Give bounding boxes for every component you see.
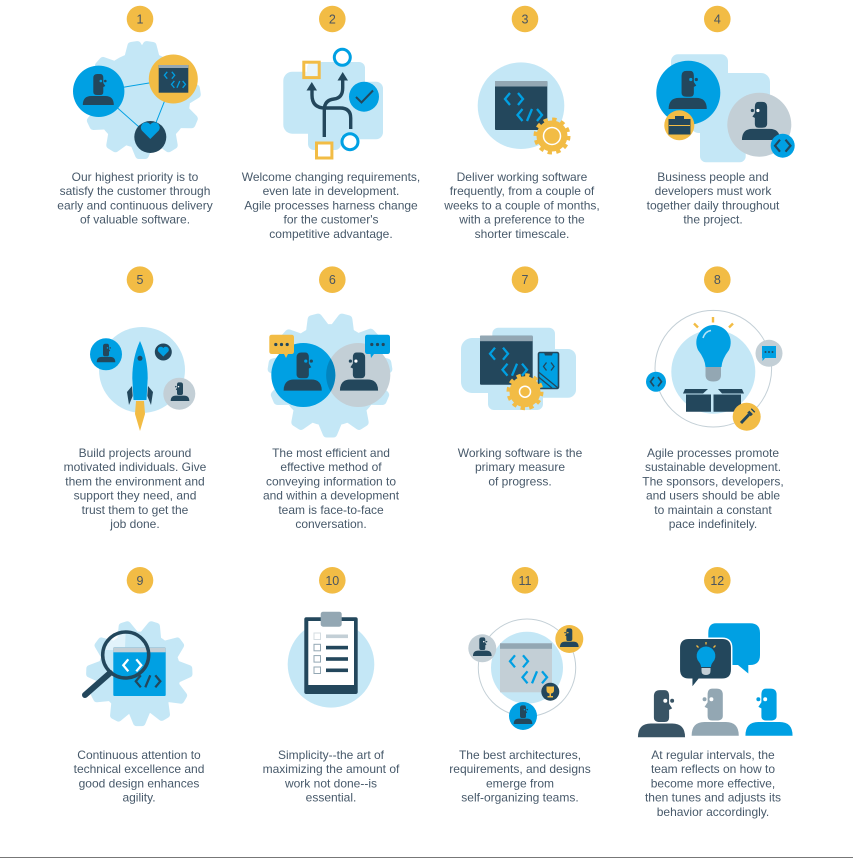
badge 1 — [127, 6, 153, 32]
badge 10: 10 — [325, 574, 339, 588]
text 7: Working software is the — [458, 446, 583, 460]
badge 12 — [704, 567, 731, 594]
badge 6 — [319, 266, 346, 293]
text 7 — [458, 446, 583, 488]
panel 9: technical excellence — [74, 567, 204, 805]
text 11: The best architectures, — [459, 748, 581, 762]
badge 5 — [127, 266, 153, 293]
text 12 — [645, 748, 781, 819]
text 11: requirements, and designs — [449, 762, 591, 776]
text 3: with a preference to the — [458, 213, 585, 227]
icon: magnifier over code — [85, 623, 189, 722]
icon: three people with speech bubbles — [638, 623, 793, 737]
badge 9: 9 — [137, 574, 144, 588]
panel 7: working software — [458, 266, 583, 488]
text 6: effective method of — [280, 460, 382, 474]
text 8: The sponsors, developers, — [642, 474, 784, 488]
badge 3 — [512, 6, 538, 32]
panel 10: simplicity — [263, 567, 400, 805]
text 5 — [64, 446, 207, 531]
text 4: developers must work — [655, 184, 772, 198]
text 9: agility. — [122, 791, 156, 805]
badge 8 — [704, 266, 731, 293]
text 2: even late in development. — [263, 184, 399, 198]
badge 2: 2 — [329, 12, 336, 26]
badge 4 — [704, 6, 731, 32]
text 3: shorter timescale. — [475, 227, 569, 241]
text 8: pace indefinitely. — [669, 517, 757, 531]
text 10: essential. — [306, 791, 356, 805]
text 9 — [74, 748, 204, 805]
panel 2: changing requirements — [242, 6, 420, 241]
text 1: Our highest priority is to — [72, 170, 199, 184]
text 8: Agile processes promote — [647, 446, 779, 460]
text 10 — [263, 748, 400, 805]
text 5: Build projects around — [79, 446, 191, 460]
icon: light bulb from box — [646, 310, 782, 431]
text 2: Agile processes harness change — [244, 198, 418, 212]
text 11 — [449, 748, 591, 805]
badge 7 — [512, 266, 538, 293]
badge 11 — [512, 567, 538, 594]
text 5: support they need, and — [74, 489, 196, 503]
icon: code window with gear — [478, 62, 568, 152]
text 8: sustainable development. — [645, 460, 781, 474]
text 1 — [57, 170, 213, 227]
text 8: and users should be able — [646, 489, 780, 503]
badge 7: 7 — [522, 273, 529, 287]
icon: rocket — [90, 327, 195, 431]
panel 8: sustainable development — [642, 266, 784, 531]
panel 1: customer satisfaction — [57, 6, 213, 227]
text 1: of valuable software. — [80, 213, 190, 227]
icon: gear blob with person, code and heart — [73, 44, 198, 155]
badge 2 — [319, 6, 346, 32]
text 12: At regular intervals, the — [651, 748, 775, 762]
text 9: technical excellence and — [74, 762, 204, 776]
text 12: behavior accordingly. — [657, 805, 769, 819]
text 6: team is face-to-face — [278, 503, 384, 517]
badge 12: 12 — [710, 574, 724, 588]
text 8 — [642, 446, 784, 531]
panel 6: face-to-face conversation — [263, 266, 400, 531]
text 12: then tunes and adjusts its — [645, 791, 781, 805]
icon: window, phone and gear — [461, 328, 576, 410]
text 1: satisfy the customer through — [60, 184, 210, 198]
text 7: primary measure — [475, 460, 565, 474]
text 11: emerge from — [486, 776, 554, 790]
text 3: frequently, from a couple of — [450, 184, 595, 198]
text 2 — [242, 170, 420, 241]
panel 3: frequent delivery — [443, 6, 600, 241]
text 5: job done. — [109, 517, 160, 531]
text 4: together daily throughout — [647, 198, 780, 212]
text 9: Continuous attention to — [77, 748, 201, 762]
text 7: of progress. — [488, 474, 552, 488]
text 3: Deliver working software — [457, 170, 588, 184]
icon: two people talking — [269, 316, 390, 433]
badge 9 — [127, 567, 153, 594]
text 2: Welcome changing requirements, — [242, 170, 420, 184]
text 6: conversation. — [295, 517, 367, 531]
panel 12: team reflection — [638, 567, 793, 819]
badge 3: 3 — [522, 12, 529, 26]
text 12: become more effective, — [651, 776, 775, 790]
text 10: Simplicity--the art of — [278, 748, 385, 762]
badge 11: 11 — [519, 574, 532, 588]
text 12: team reflects on how to — [651, 762, 775, 776]
text 6: and within a development — [263, 489, 400, 503]
text 1: early and continuous delivery — [57, 198, 213, 212]
text 6 — [263, 446, 400, 531]
text 4: the project. — [683, 213, 743, 227]
icon: team around architecture window — [468, 619, 583, 730]
text 4 — [647, 170, 780, 227]
icon: clipboard checklist — [288, 612, 374, 708]
panel 11: self-organizing teams — [449, 567, 591, 805]
text 5: motivated individuals. Give — [64, 460, 207, 474]
text 10: maximizing the amount of — [263, 762, 400, 776]
badge 4: 4 — [714, 12, 721, 26]
icon: branching arrows — [283, 49, 383, 158]
text 3: weeks to a couple of months, — [443, 198, 600, 212]
text 9: good design enhances — [79, 776, 199, 790]
text 6: The most efficient and — [272, 446, 390, 460]
badge 6: 6 — [329, 273, 336, 287]
text 6: conveying information to — [266, 474, 396, 488]
text 5: them the environment and — [65, 474, 205, 488]
panel 4: business and developers — [647, 6, 795, 227]
text 2: competitive advantage. — [269, 227, 393, 241]
text 5: trust them to get the — [82, 503, 189, 517]
badge 5: 5 — [137, 273, 144, 287]
text 8: to maintain a constant — [654, 503, 772, 517]
text 4: Business people and — [657, 170, 769, 184]
icon: business person and developer — [656, 54, 795, 162]
text 2: for the customer's — [284, 213, 378, 227]
text 3 — [443, 170, 600, 241]
text 11: self-organizing teams. — [461, 791, 579, 805]
badge 1: 1 — [137, 12, 144, 26]
badge 8: 8 — [714, 273, 721, 287]
text 10: work not done--is — [284, 776, 377, 790]
panel 5: motivated individuals — [64, 266, 207, 531]
badge 10 — [319, 567, 346, 594]
